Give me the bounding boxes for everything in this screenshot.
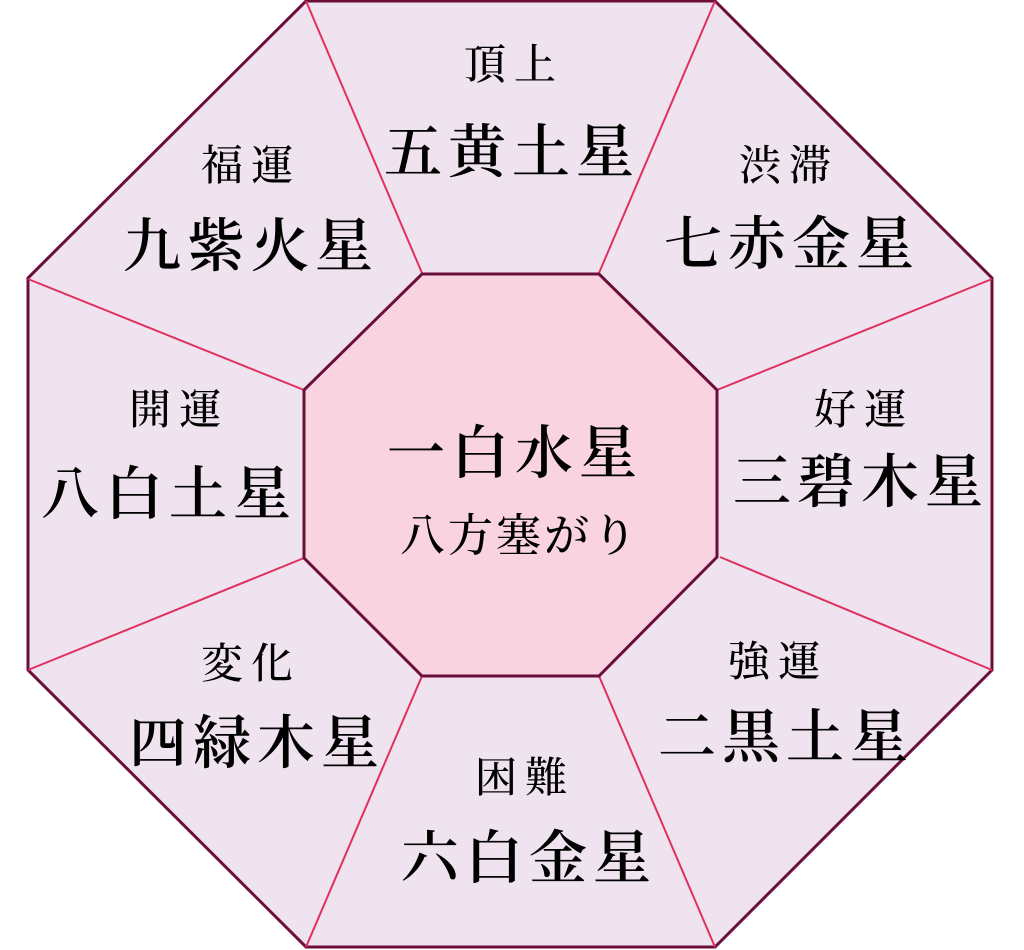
lower right segment — [658, 640, 914, 770]
upper left segment — [123, 144, 379, 279]
left segment: 開運 — [129, 388, 229, 434]
lower right segment: 二黒土星 — [658, 705, 914, 770]
upper right segment — [664, 144, 920, 277]
right segment — [733, 388, 989, 515]
lower left segment — [129, 642, 385, 776]
lower right segment: 強運 — [728, 640, 828, 686]
right segment: 三碧木星 — [733, 450, 989, 515]
left segment — [41, 388, 297, 527]
upper right segment: 渋滞 — [739, 144, 839, 190]
upper left segment: 福運 — [201, 144, 301, 190]
top segment — [384, 43, 640, 185]
upper right segment: 七赤金星 — [664, 212, 920, 277]
left segment: 八白土星 — [41, 462, 297, 527]
lower left segment: 変化 — [201, 642, 301, 688]
top segment: 五黄土星 — [384, 120, 640, 185]
upper left segment: 九紫火星 — [123, 214, 379, 279]
center octagon — [304, 274, 717, 676]
bottom segment: 困難 — [475, 756, 575, 802]
center label — [387, 421, 643, 561]
top segment: 頂上 — [464, 43, 564, 89]
bottom segment: 六白金星 — [401, 826, 657, 891]
right segment: 好運 — [814, 388, 914, 434]
bottom segment — [401, 756, 657, 891]
lower left segment: 四緑木星 — [129, 711, 385, 776]
center label: 八方塞がり — [400, 511, 640, 561]
center label: 一白水星 — [387, 421, 643, 486]
